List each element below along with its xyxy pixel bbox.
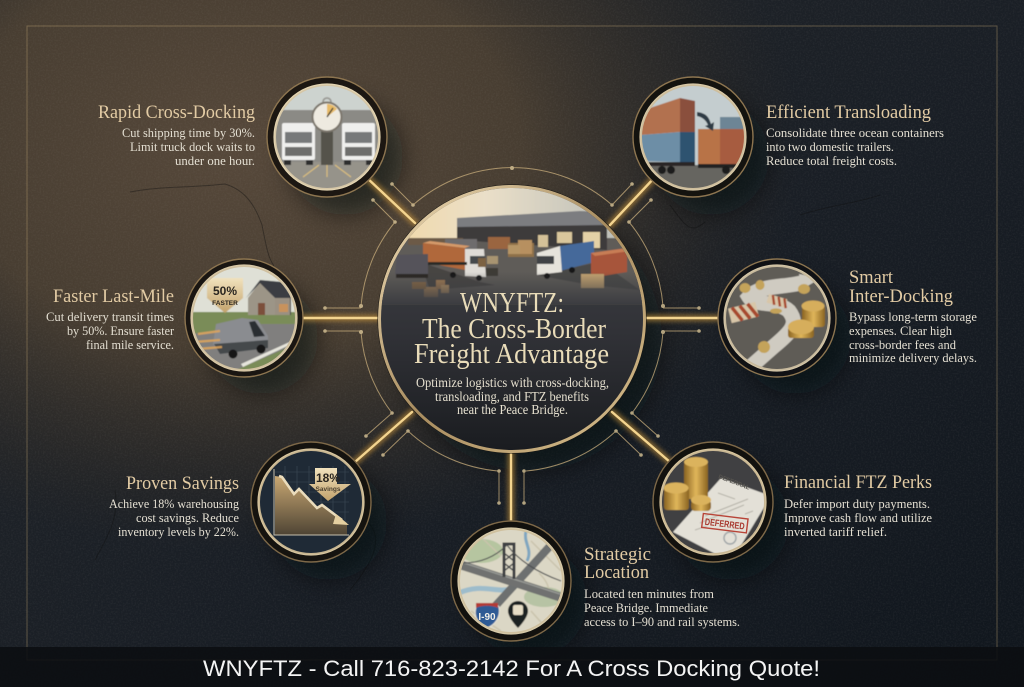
node: strategic location icon: I-90 (478, 612, 496, 623)
node: strategic location text: Strategic (584, 544, 651, 565)
node: efficient transloading icon (633, 77, 753, 197)
truck: orange left (423, 243, 465, 270)
node: efficient transloading text: Reduce total freight costs. (766, 153, 897, 168)
node: faster last-mile text (46, 286, 175, 352)
node: faster last-mile icon (185, 259, 303, 377)
shadows on yard (426, 264, 492, 288)
node: faster last-mile text: final mile service. (86, 337, 174, 352)
node: proven savings text: Achieve 18% warehousing (109, 496, 239, 511)
node: faster last-mile icon: FASTER (212, 300, 238, 307)
hub title (414, 288, 609, 370)
node: faster last-mile text: by 50%. Ensure faster (67, 323, 175, 338)
truck: blue right (560, 241, 594, 271)
node: rapid cross-docking text: Cut shipping time by 30%. (122, 125, 255, 140)
node: financial FTZ perks text: inverted tariff relief. (784, 524, 887, 539)
node: proven savings text: cost savings. Reduce (136, 510, 239, 525)
node: smart inter-docking text: cross-border fees and (849, 337, 956, 352)
hub description: near the Peace Bridge. (457, 403, 568, 418)
footer call-to-action bar: WNYFTZ - Call 716-823-2142 For A Cross Docking Quote! (203, 656, 820, 681)
node: financial FTZ perks text: Financial FTZ Perks (784, 472, 932, 493)
node: rapid cross-docking text: Limit truck dock waits to (130, 139, 255, 154)
hub title: Freight Advantage (414, 339, 609, 370)
node: faster last-mile text: Faster Last-Mile (53, 286, 174, 307)
hub photo: freight yard (378, 185, 646, 304)
node: smart inter-docking icon (718, 259, 836, 377)
node: financial FTZ perks icon: DEFERRED (704, 517, 745, 533)
node: smart inter-docking text: expenses. Clear high (849, 323, 952, 338)
node: proven savings text (109, 473, 239, 539)
containers and pallets (590, 252, 628, 276)
node: strategic location text: access to I–90 and rail systems. (584, 614, 740, 629)
hub description: Optimize logistics with cross-docking, (416, 376, 609, 391)
node: financial FTZ perks text (784, 472, 932, 539)
node: efficient transloading text: Efficient Transloading (766, 102, 931, 123)
node: financial FTZ perks icon (653, 442, 773, 562)
node: rapid cross-docking text: Rapid Cross-Docking (98, 102, 255, 123)
node: proven savings text: Proven Savings (126, 473, 239, 494)
node: efficient transloading text: into two domestic trailers. (766, 139, 894, 154)
node: proven savings icon: Savings (316, 486, 341, 493)
node: financial FTZ perks text: Improve cash flow and utilize (784, 510, 932, 525)
node: rapid cross-docking text (98, 102, 255, 168)
node: strategic location text (584, 544, 740, 629)
node: smart inter-docking text (849, 267, 977, 365)
glowing connectors from hub to nodes (303, 177, 718, 521)
node: proven savings text: inventory levels by 22%. (118, 524, 239, 539)
node: faster last-mile text: Cut delivery transit times (46, 309, 174, 324)
node: smart inter-docking text: Inter-Docking (849, 286, 953, 307)
node: strategic location text: Peace Bridge. Immediate (584, 600, 708, 615)
node: strategic location icon (451, 521, 571, 641)
node: faster last-mile icon: 50% (213, 284, 237, 298)
node: rapid cross-docking text: under one hour. (175, 153, 255, 168)
node: smart inter-docking text: Bypass long-term storage (849, 309, 977, 324)
node: efficient transloading text: Consolidate three ocean containers (766, 125, 944, 140)
node: proven savings icon (251, 442, 371, 562)
hub: central circle (378, 184, 646, 454)
node: smart inter-docking text: Smart (849, 267, 894, 288)
circuit lines around hub (323, 166, 701, 505)
footer call-to-action bar (0, 647, 1024, 687)
node: strategic location text: Located ten minutes from (584, 586, 714, 601)
node: efficient transloading text (766, 102, 944, 168)
node: strategic location text: Location (584, 562, 649, 583)
node: smart inter-docking text: minimize delivery delays. (849, 350, 977, 365)
node drop shadows (206, 99, 851, 659)
hub description: transloading, and FTZ benefits (435, 390, 589, 405)
node: financial FTZ perks icon: DEFERRAL (717, 474, 750, 492)
hub title: The Cross-Border (422, 314, 607, 345)
node: proven savings icon: 18% (316, 471, 340, 485)
hub description (416, 376, 609, 418)
node: rapid cross-docking icon (267, 77, 387, 197)
hub title: WNYFTZ: (460, 288, 564, 319)
node: financial FTZ perks text: Defer import duty payments. (784, 496, 930, 511)
